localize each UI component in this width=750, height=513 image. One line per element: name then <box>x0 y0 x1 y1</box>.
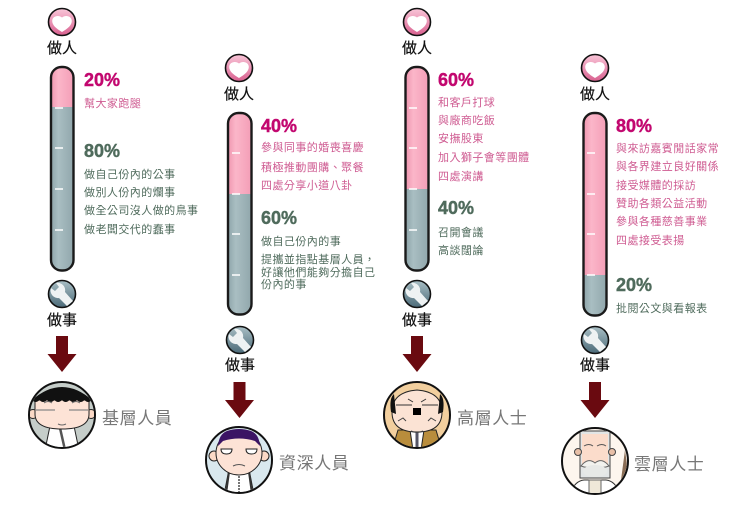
label: 高層人士: 高層人士 <box>457 409 527 428</box>
text: 做事 80%: 80% <box>84 141 120 161</box>
text: 做人 80%: 與各界建立良好關係 <box>616 159 719 173</box>
text: 做事 80%: 做自己份內的公事 <box>84 167 176 181</box>
text: 做人 20%: 20% <box>84 70 120 90</box>
label: 基層人員: 基層人員 <box>102 409 172 428</box>
label: 做人: 做人 <box>580 86 610 103</box>
text: 做人 80%: 四處接受表揚 <box>616 233 685 247</box>
text: 做事 20%: 20% <box>616 275 652 295</box>
text: 做人 80%: 參與各種慈善事業 <box>616 214 708 228</box>
text: 做事 60%: 提攜並指點基層人員， <box>261 252 376 266</box>
gauge: 20% / 80% <box>50 66 74 271</box>
text: 做人 40%: 積極推動團購、聚餐 <box>261 160 364 174</box>
text: 做人 60%: 加入獅子會等團體 <box>438 150 530 164</box>
arrow <box>402 336 432 372</box>
gauge: 40% / 60% <box>227 112 252 316</box>
text: 做事 40%: 召開會議 <box>438 225 484 239</box>
text: 做人 60%: 60% <box>438 70 474 90</box>
icon: heart <box>48 8 76 36</box>
gauge: 60% / 40% <box>405 66 429 271</box>
text: 做事 40%: 40% <box>438 198 474 218</box>
text: 做事 80% <box>84 141 198 236</box>
text: 做事 80%: 做別人份內的爛事 <box>84 185 176 199</box>
text: 做人 80%: 與來訪嘉賓閒話家常 <box>616 141 719 155</box>
text: 做人 20% <box>84 70 141 110</box>
text: 做人 60% <box>438 70 530 183</box>
text: 做事 20% <box>616 275 708 315</box>
panel: 雲層人士 column <box>562 54 719 495</box>
text: 做事 60%: 份內的事 <box>261 277 307 291</box>
avatar: 雲層人士 <box>562 428 629 495</box>
text: 做事 60%: 60% <box>261 208 297 228</box>
text: 做事 40%: 高談闊論 <box>438 243 484 257</box>
avatar: 基層人員 <box>28 382 96 450</box>
label: 做事: 做事 <box>580 357 610 374</box>
text: 做事 40% <box>438 198 484 257</box>
panel: 資深人員 column <box>206 54 376 495</box>
text: 做人 60%: 與廠商吃飯 <box>438 113 495 127</box>
text: 做人 60%: 安撫股東 <box>438 131 484 145</box>
arrow <box>580 382 610 418</box>
arrow <box>225 382 254 418</box>
text: 做人 40%: 參與同事的婚喪喜慶 <box>261 140 364 154</box>
icon: wrench <box>582 326 608 354</box>
gauge: 80% / 20% <box>583 112 607 316</box>
avatar: 資深人員 <box>206 427 272 495</box>
text: 做人 60%: 和客戶打球 <box>438 95 495 109</box>
label: 做事: 做事 <box>225 357 255 374</box>
panel: 高層人士 column <box>384 8 530 450</box>
text: 做人 40%: 40% <box>261 116 297 136</box>
text: 做事 20%: 批閱公文與看報表 <box>616 301 708 315</box>
text: 做人 80%: 贊助各類公益活動 <box>616 196 708 210</box>
avatar: 高層人士 <box>384 382 450 450</box>
text: 做人 60%: 四處演講 <box>438 169 484 183</box>
label: 做事: 做事 <box>402 312 432 329</box>
label: 做人: 做人 <box>402 40 432 57</box>
label: 做事: 做事 <box>47 312 77 329</box>
text: 做事 80%: 做全公司沒人做的鳥事 <box>84 203 198 217</box>
text: 做人 80%: 80% <box>616 116 652 136</box>
label: 雲層人士: 雲層人士 <box>634 455 704 474</box>
icon: wrench <box>48 280 76 308</box>
text: 做人 20%: 幫大家跑腿 <box>84 96 141 110</box>
text: 做事 60%: 好讓他們能夠分擔自己 <box>261 265 376 279</box>
label: 做人: 做人 <box>224 86 254 103</box>
icon: wrench <box>226 326 254 354</box>
text: 做人 80%: 接受媒體的採訪 <box>616 178 696 192</box>
icon: heart <box>404 8 430 36</box>
icon: heart <box>226 54 252 82</box>
label: 做人: 做人 <box>47 40 77 57</box>
icon: wrench <box>404 280 430 308</box>
icon: heart <box>582 54 608 82</box>
text: 做事 60%: 做自己份內的事 <box>261 234 341 248</box>
text: 做人 40% <box>261 116 364 192</box>
label: 資深人員: 資深人員 <box>279 454 349 473</box>
panel: 基層人員 column <box>28 8 198 450</box>
text: 做事 80%: 做老闆交代的蠢事 <box>84 222 176 236</box>
text: 做人 40%: 四處分享小道八卦 <box>261 178 353 192</box>
arrow <box>48 336 76 372</box>
text: 做事 60% <box>261 208 376 291</box>
text: 做人 80% <box>616 116 719 247</box>
